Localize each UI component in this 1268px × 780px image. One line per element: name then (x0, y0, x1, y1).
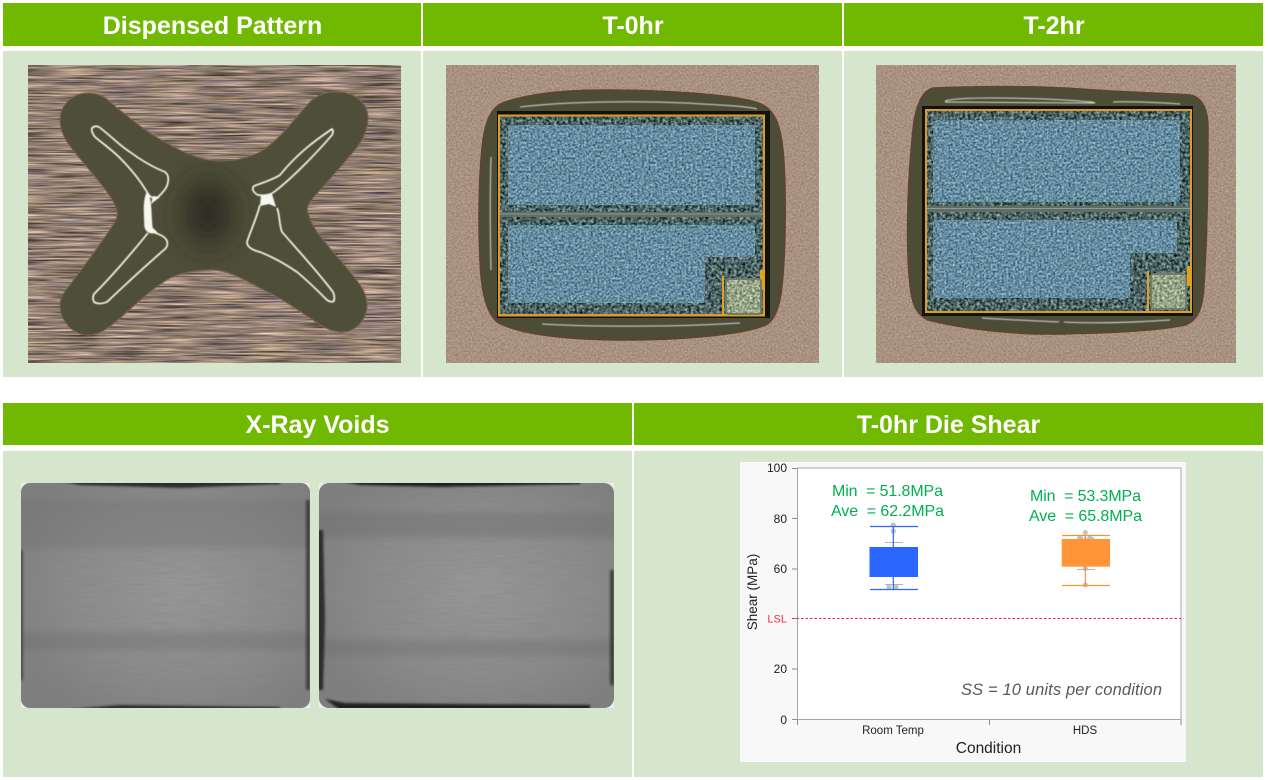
die pads (508, 125, 755, 205)
die (497, 111, 770, 318)
header: T-0hr Die Shear (634, 403, 1263, 445)
header: Dispensed Pattern: Dispensed Pattern (103, 12, 322, 40)
annotation: Room Temp stats (831, 483, 944, 520)
panel: T-2hr (844, 51, 1263, 377)
die scribe street (927, 206, 1190, 212)
LSL limit line: LSL (767, 614, 787, 626)
chart: die shear box plot (740, 462, 1186, 762)
annotation: sample size: SS = 10 units per condition (961, 681, 1162, 699)
epoxy fillet (479, 90, 785, 340)
annotation: HDS stats: Ave = 65.8MPa (1029, 508, 1142, 525)
box: HDS (1062, 530, 1110, 588)
panel: T-0hr (423, 51, 842, 377)
epoxy fillet (908, 87, 1208, 334)
image: T-0hr die on substrate (446, 65, 819, 363)
annotation: Room Temp stats: Ave = 62.2MPa (831, 503, 944, 520)
X shaped epoxy (60, 92, 368, 335)
annotation: HDS stats (1029, 488, 1142, 525)
fillet highlights (490, 102, 757, 326)
annotation: HDS stats: Min = 53.3MPa (1030, 488, 1141, 505)
header: X-Ray Voids: X-Ray Voids (245, 411, 390, 439)
fillet highlights (945, 98, 1180, 323)
image: X-ray die left (21, 483, 310, 708)
panel: X-ray voids (3, 451, 632, 777)
y axis tick labels: 20 (774, 662, 787, 676)
panel: die shear (634, 451, 1263, 777)
image: X-ray die right (319, 483, 614, 708)
y axis tick labels (767, 461, 787, 727)
y axis title: Shear (MPa) (745, 554, 760, 630)
x axis title: Condition (956, 740, 1021, 757)
header: T-0hr (423, 3, 842, 46)
annotation: Room Temp stats: Min = 51.8MPa (832, 483, 943, 500)
header: T-2hr (844, 3, 1263, 46)
die pads (933, 120, 1180, 202)
box: Room Temp (870, 522, 918, 590)
image: T-2hr die on substrate (876, 65, 1236, 363)
y axis tick labels: 80 (774, 512, 787, 526)
x axis labels: HDS (1073, 725, 1097, 737)
header: X-Ray Voids (3, 403, 632, 445)
header: Dispensed Pattern (3, 3, 421, 46)
header: T-0hr Die Shear: T-0hr Die Shear (857, 411, 1040, 439)
die scribe street (500, 212, 763, 217)
x axis labels: Room Temp (862, 725, 924, 737)
header: T-2hr: T-2hr (1023, 12, 1085, 40)
image: dispensed X pattern on brushed metal (28, 65, 401, 363)
y axis tick labels: 60 (774, 562, 787, 576)
panel: dispensed pattern (3, 51, 421, 377)
die (922, 106, 1193, 316)
y axis tick labels: 0 (780, 713, 787, 727)
header: T-0hr: T-0hr (602, 12, 664, 40)
x axis labels (862, 725, 1097, 737)
